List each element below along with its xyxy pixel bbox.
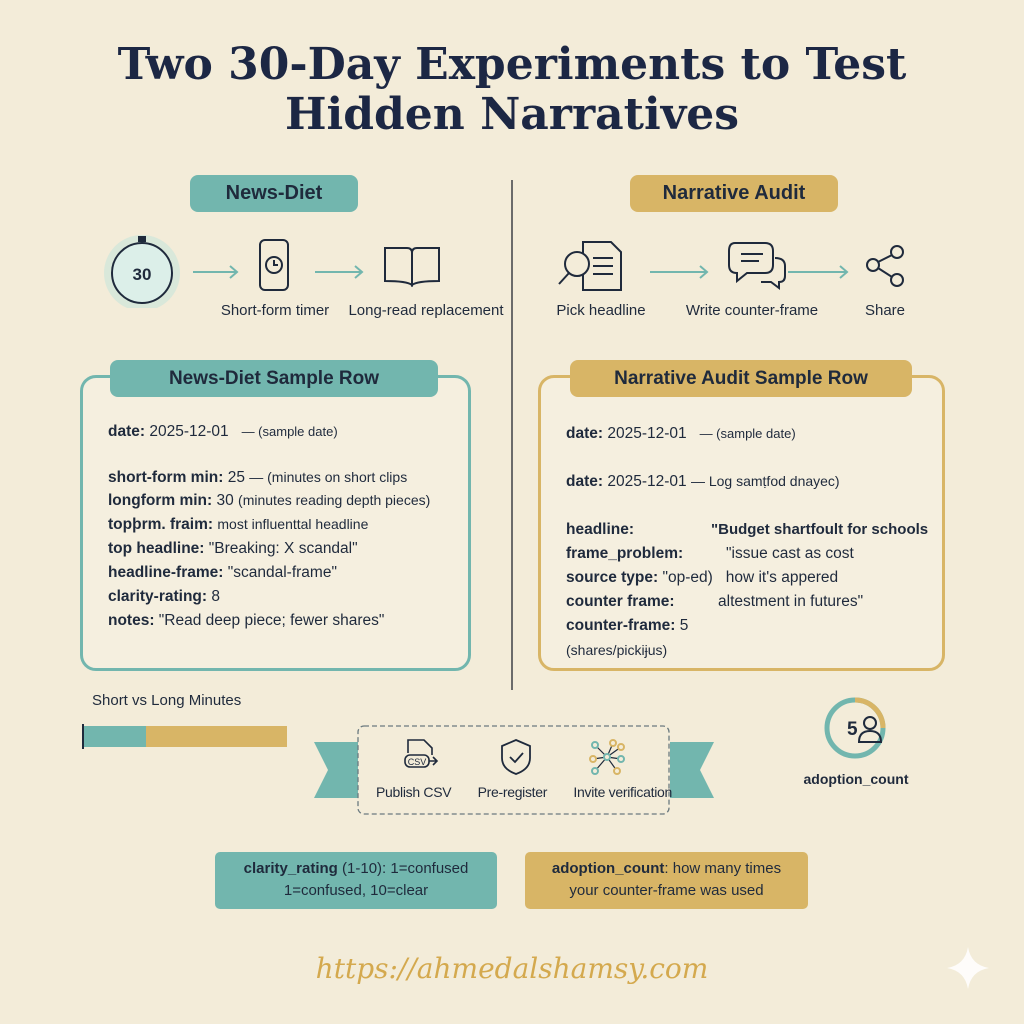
panel: News-Diet sample row: short-form min: 25 — (minutes on short clips xyxy=(108,469,407,486)
labels: Pre-register xyxy=(478,784,547,800)
panel: News-Diet sample row xyxy=(80,375,471,671)
text lines: date: 2025-12-01 — (sample date) xyxy=(566,425,796,442)
pill: Narrative Audit xyxy=(630,175,838,212)
bar chart xyxy=(82,724,287,749)
panel: News-Diet sample row: topþrm. fraim: most influenttal headline xyxy=(108,516,368,533)
footer url: https://ahmedalshamsy.com xyxy=(316,952,708,985)
icon: adoption count badge xyxy=(824,698,886,758)
text lines: date: 2025-12-01 — (sample date) xyxy=(108,423,338,440)
panel: Narrative Audit sample row: counter-frame: 5 xyxy=(566,617,688,634)
panel: News-Diet sample row: notes: "Read deep piece; fewer shares" xyxy=(108,612,384,629)
icons row right xyxy=(558,241,904,291)
icon: magnifier doc xyxy=(559,242,621,290)
pill: News-Diet: News-Diet xyxy=(226,182,322,204)
panel: Narrative Audit sample row: (shares/pickiɉus) xyxy=(566,642,667,658)
chart label: Short vs Long Minutes xyxy=(92,692,241,709)
icon: timer xyxy=(104,235,180,311)
pill: News-Diet xyxy=(190,175,358,212)
legend box: adoption: adoption_count: how many times xyxy=(552,860,781,877)
icon: sparkle xyxy=(948,948,988,988)
icon: csv: CSV xyxy=(408,757,426,767)
arrow xyxy=(650,266,707,278)
icon: csv xyxy=(404,739,438,768)
icon: phone xyxy=(260,240,288,290)
legend box: adoption: your counter-frame was used xyxy=(569,882,764,899)
icon: share xyxy=(867,246,903,286)
header: News-Diet Sample Row xyxy=(110,360,438,397)
legend box: clarity: 1=confused, 10=clear xyxy=(284,882,428,899)
header: News-Diet Sample Row: News-Diet Sample Row xyxy=(169,368,379,388)
panel: Narrative Audit sample row: frame_problem: xyxy=(566,545,683,562)
title xyxy=(118,39,906,140)
panel: Narrative Audit sample row: source type: "op-ed) how it's appered xyxy=(566,569,838,586)
arrow xyxy=(193,266,237,278)
title: Hidden Narratives xyxy=(285,89,739,140)
label: pick headline: Pick headline xyxy=(556,302,646,319)
label: short-form timer: Short-form timer xyxy=(221,302,329,319)
panel: Narrative Audit sample row: "issue cast as cost xyxy=(726,545,854,562)
arrow xyxy=(315,266,362,278)
arrow xyxy=(788,266,847,278)
labels xyxy=(376,784,672,800)
icon: timer: 30 xyxy=(133,265,151,284)
panel: Narrative Audit sample row: "Budget shartfoult for schools xyxy=(711,521,928,538)
icon: book xyxy=(385,248,439,285)
panel: Narrative Audit sample row xyxy=(538,375,945,671)
label: write counter-frame: Write counter-frame xyxy=(686,302,818,319)
legend box: adoption xyxy=(525,852,808,909)
icons row left xyxy=(104,235,440,308)
panel: News-Diet sample row: clarity-rating: 8 xyxy=(108,588,220,605)
label: long-read: Long-read replacement xyxy=(348,302,504,319)
labels: Invite verification xyxy=(573,784,672,800)
title: Two 30-Day Experiments to Test xyxy=(118,39,906,90)
icon: adoption count badge: 5 xyxy=(847,719,858,740)
icon: network xyxy=(589,739,625,775)
ribbon banner xyxy=(314,725,714,815)
panel: News-Diet sample row: top headline: "Breaking: X scandal" xyxy=(108,540,358,557)
labels: Publish CSV xyxy=(376,784,451,800)
label: share: Share xyxy=(865,302,905,319)
label: adoption_count: adoption_count xyxy=(804,771,908,787)
panel: Narrative Audit sample row: altestment in futures" xyxy=(718,593,863,610)
pill: Narrative Audit: Narrative Audit xyxy=(663,182,805,204)
icon: chat xyxy=(729,243,785,288)
panel: News-Diet sample row: longform min: 30 (minutes reading depth pieces) xyxy=(108,492,430,509)
header: Narrative Audit Sample Row xyxy=(570,360,912,397)
legend box: clarity xyxy=(215,852,497,909)
panel: Narrative Audit sample row: counter frame: xyxy=(566,593,675,610)
panel: Narrative Audit sample row: headline: xyxy=(566,521,634,538)
icon: shield xyxy=(501,739,531,775)
divider xyxy=(511,180,512,690)
panel: Narrative Audit sample row: date: 2025-12-01 — Log samṭfod dnayec) xyxy=(566,473,840,490)
panel: News-Diet sample row: headline-frame: "scandal-frame" xyxy=(108,564,337,581)
legend box: clarity: clarity_rating (1-10): 1=confused xyxy=(244,860,468,877)
header: Narrative Audit Sample Row: Narrative Audit Sample Row xyxy=(614,368,868,388)
